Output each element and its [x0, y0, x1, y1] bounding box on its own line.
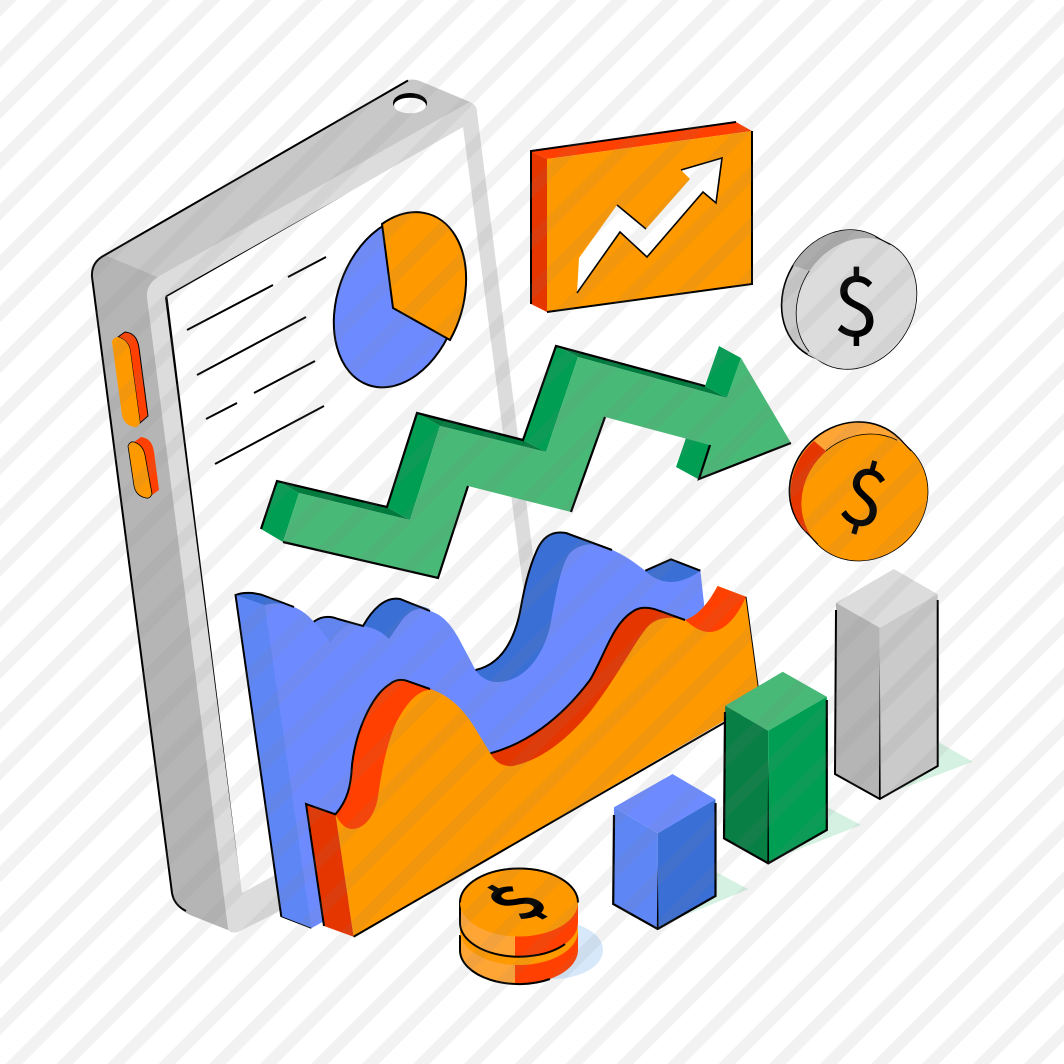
- blue area chart: [236, 532, 708, 928]
- orange chart sign: [531, 122, 752, 312]
- coin stack: [457, 867, 603, 984]
- silver dollar coin: $: [833, 240, 879, 360]
- camera hole: [393, 93, 427, 113]
- upper side button: [112, 332, 148, 427]
- blue top band left: [236, 593, 294, 607]
- pie chart: [312, 199, 483, 405]
- coin stack shadow: [503, 921, 603, 979]
- arrow dark top edges: [277, 346, 727, 520]
- phone screen: [166, 127, 530, 893]
- orange dollar coin: $: [829, 430, 903, 553]
- blue area left face: [236, 595, 311, 928]
- lower coin: [460, 897, 578, 984]
- bar shadows: [674, 742, 973, 920]
- red band right: [685, 586, 746, 632]
- silver dollar coin: [758, 208, 940, 391]
- sign top side: [531, 122, 752, 159]
- sign left side: [531, 151, 547, 312]
- sign front: [547, 131, 752, 312]
- blue crest band small: [363, 599, 436, 639]
- orange area chart: [306, 586, 760, 937]
- green zigzag arrow: [261, 346, 791, 578]
- blue crest band large: [476, 532, 609, 682]
- red left face: [306, 804, 354, 937]
- green bar: [724, 672, 827, 863]
- red band middle: [490, 608, 685, 766]
- upper coin: [457, 867, 578, 957]
- upper coin: $: [457, 867, 571, 933]
- red band left: [335, 680, 433, 829]
- phone top side: [105, 80, 470, 277]
- blue area front: [236, 532, 708, 928]
- phone: [92, 80, 545, 932]
- blue notch band: [314, 617, 363, 643]
- orange area front: [335, 586, 760, 937]
- blue bar: [613, 774, 716, 929]
- phone front bezel: [147, 102, 545, 932]
- gray bar: [835, 569, 938, 799]
- screen text lines: [187, 257, 326, 464]
- blue right end band: [645, 559, 700, 582]
- arrow green side faces: [261, 346, 741, 542]
- orange dollar coin: [763, 396, 954, 587]
- arrow front face: [283, 357, 791, 578]
- lower side button: [128, 437, 159, 498]
- white rising arrow: [577, 158, 722, 293]
- phone left side: [92, 255, 233, 932]
